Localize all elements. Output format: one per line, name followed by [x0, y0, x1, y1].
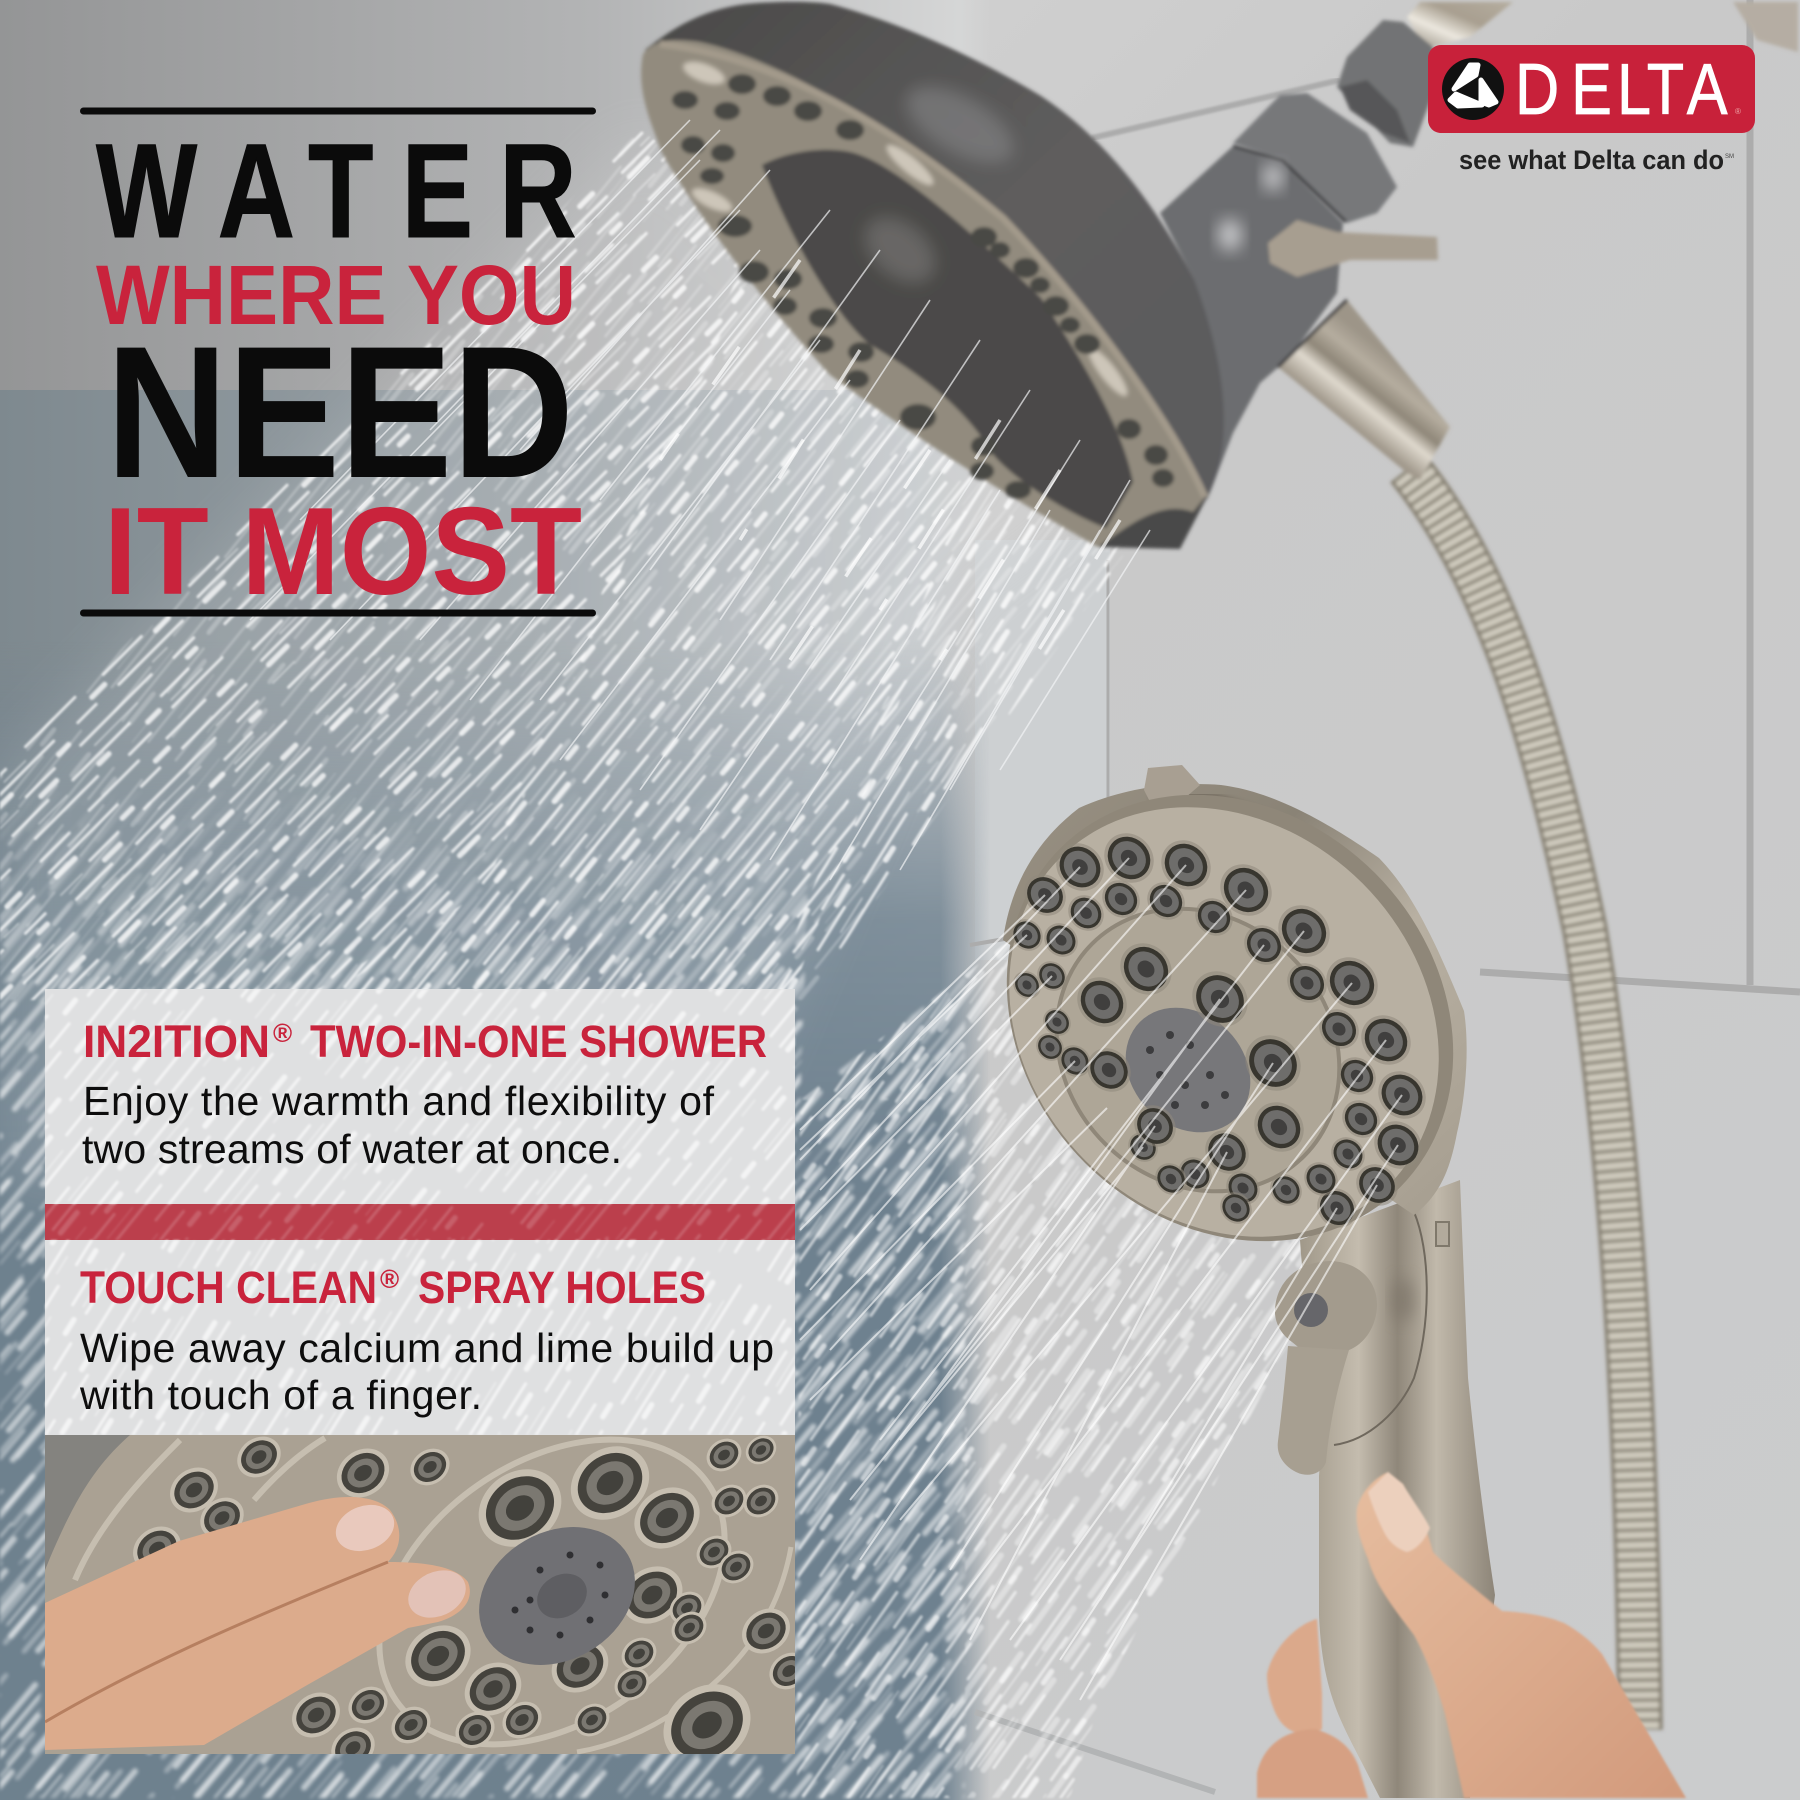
individual water jets from hand shower: [800, 858, 1402, 1700]
panel: features: [45, 989, 795, 1435]
flexible hose: [1408, 468, 1640, 1730]
feature heading: Touch Clean: [80, 1262, 706, 1313]
hand holding the shower: [1257, 1472, 1686, 1798]
collar: [1233, 93, 1397, 223]
water spray: hand shower stream: [797, 940, 1370, 1798]
lever and knob: [1275, 1222, 1449, 1475]
heading line: IT MOST: IT MOST: [104, 483, 582, 621]
handle: [1300, 1180, 1495, 1798]
heading line: WHERE YOU: WHERE YOU: [96, 248, 576, 342]
nozzles in close-up: [133, 1436, 795, 1754]
feature heading: In2ition: TWO-IN-ONE SHOWER: [310, 1016, 767, 1067]
individual water jets from overhead head: [250, 120, 1150, 880]
heading line: NEED: NEED: [106, 307, 574, 517]
overhead head nozzles: [672, 74, 1174, 499]
overhead head highlights: [680, 57, 1133, 401]
shower neck: [1160, 147, 1343, 500]
overhead head face: [641, 40, 1205, 547]
top rule: [80, 108, 596, 114]
feature description: In2ition: two streams of water at once.: [82, 1126, 622, 1172]
top swivel nut: [1337, 20, 1437, 147]
oval plate edge: [1334, 1212, 1427, 1445]
feature heading: Touch Clean: TOUCH CLEAN: [80, 1262, 377, 1313]
head face: [915, 703, 1545, 1333]
center spray rosette: [1100, 982, 1276, 1158]
feature description: Touch Clean: [79, 1325, 774, 1418]
headline: [80, 108, 596, 621]
feature description: Touch Clean: Wipe away calcium and lime build up: [80, 1325, 774, 1371]
feature description: Touch Clean: with touch of a finger.: [79, 1372, 482, 1418]
connector cone: [1278, 300, 1450, 480]
wall tile grout lines: [970, 0, 1800, 1792]
inset photo: finger wiping spray holes: [45, 1435, 795, 1754]
feature description: In2ition: Enjoy the warmth and flexibility of: [83, 1078, 715, 1124]
thumbnail: [1368, 1472, 1430, 1552]
diverter lever: [1268, 220, 1438, 277]
logo: Delta badge: [1428, 45, 1755, 175]
tagline: see what Delta can do: [1459, 145, 1724, 175]
feature heading: Touch Clean: SPRAY HOLES: [418, 1262, 706, 1313]
icon: Delta three-blade mark: [1450, 65, 1496, 106]
logo: Delta badge: SM: [1725, 154, 1734, 160]
feature description: In2ition: [82, 1078, 715, 1172]
logo: Delta badge: ®: [1735, 107, 1741, 116]
hand shower: [915, 703, 1545, 1798]
feature heading: In2ition: ®: [273, 1018, 292, 1048]
water spray: overhead shower head stream: [0, 130, 1135, 1798]
center rosette close-up: [479, 1527, 635, 1665]
heading line: WATER: WATER: [96, 116, 577, 266]
water streaks through the panel: [45, 989, 795, 1435]
fingers: [45, 1497, 470, 1750]
feature heading: In2ition: IN2ITION: [83, 1016, 270, 1067]
spray nozzles: [1005, 823, 1436, 1236]
feature heading: Touch Clean: ®: [380, 1264, 399, 1294]
feature heading: In2ition: [83, 1016, 767, 1067]
logo: Delta badge: DELTA: [1515, 50, 1728, 130]
overhead head body: [645, 2, 1224, 547]
arm and mounting hardware: [641, 2, 1798, 1730]
head back shell: [1003, 784, 1467, 1215]
bottom rule: [80, 610, 596, 616]
top tab: [1144, 765, 1200, 802]
fingernails: [336, 1504, 394, 1552]
